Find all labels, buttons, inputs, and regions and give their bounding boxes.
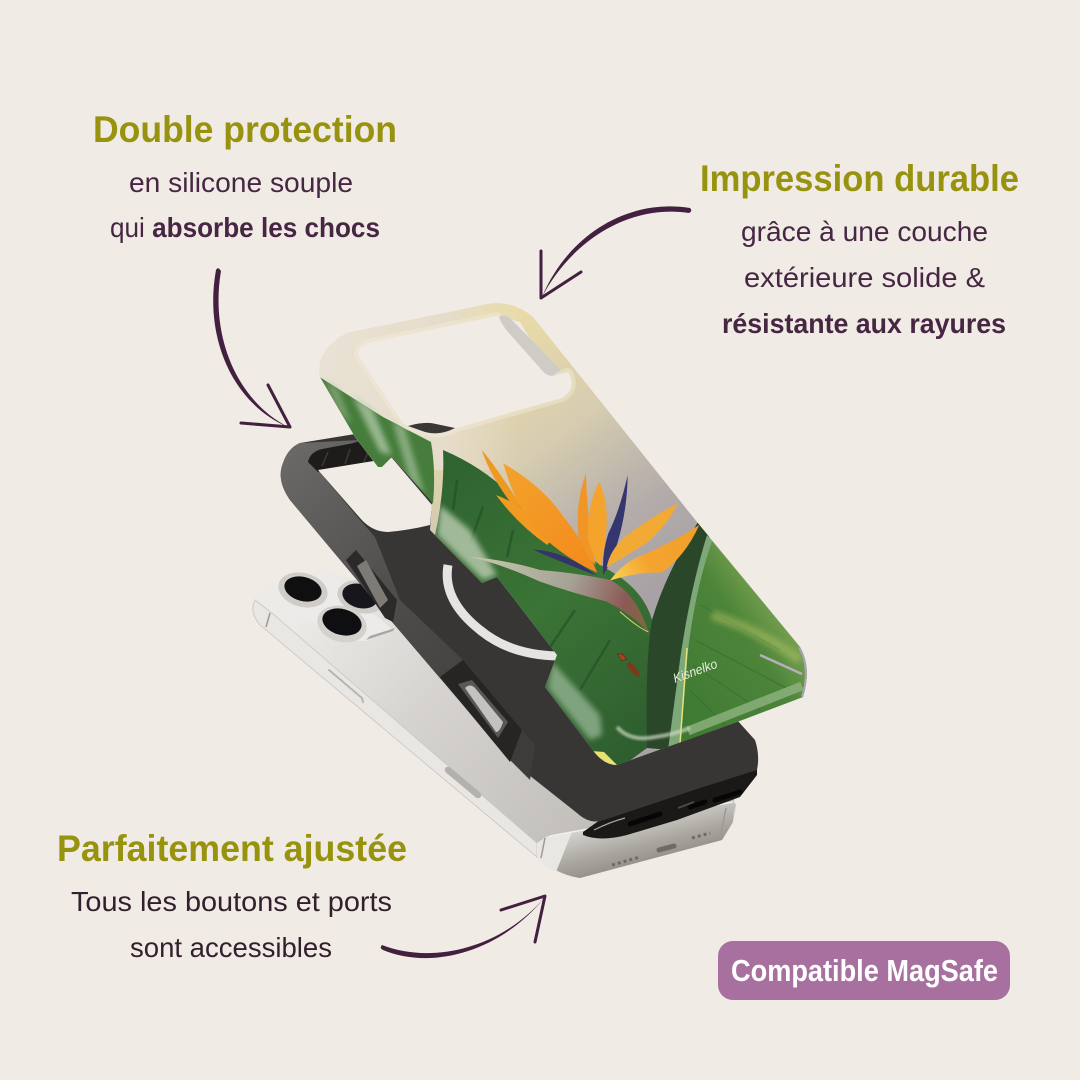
camera opening rim [358, 316, 572, 433]
text: sont accessibles: sont accessibles [130, 932, 332, 963]
badge: compatible magsafe: Compatible MagSafe [731, 953, 998, 988]
phone illustration [251, 290, 812, 878]
arrow: parfaitement ajustée to phone [381, 896, 545, 958]
heading: double protection: Double protection [93, 109, 397, 150]
button opening top [346, 550, 397, 622]
text: tous les boutons et ports: Tous les boutons et ports [71, 886, 392, 917]
text: résistante aux rayures: résistante aux rayures [722, 308, 1006, 339]
right leaf [678, 541, 812, 748]
inner grey wall [499, 316, 561, 376]
case lip [583, 750, 757, 838]
black case seen through opening [408, 423, 455, 433]
side edge [253, 600, 537, 857]
flower sheath [468, 557, 649, 633]
text: en silicone souple: en silicone souple [129, 167, 353, 198]
magsafe ring [447, 565, 558, 656]
blue petals [533, 475, 628, 576]
text: qui absorbe les chocs: qui absorbe les chocs [110, 212, 380, 243]
side buttons [329, 670, 363, 702]
text: extérieure solide: extérieure solide & [744, 262, 985, 293]
text block: double protection [93, 109, 397, 243]
leaf midrib [668, 535, 712, 750]
white phone [251, 567, 740, 878]
arrow: impression durable to case [541, 206, 691, 298]
ant [617, 654, 640, 677]
right petals [607, 503, 699, 581]
black inner case [281, 422, 758, 838]
arrow: double protection to phone [213, 268, 290, 427]
bird of paradise flower [468, 450, 699, 677]
text block: impression durable [700, 158, 1019, 339]
case body [281, 422, 758, 821]
main leaf [435, 450, 652, 770]
orange petals [482, 450, 607, 573]
outer case with printed design [315, 290, 812, 770]
text block: parfaitement ajustée [57, 828, 407, 963]
camera plateau [272, 570, 393, 641]
gloss highlight [617, 686, 802, 738]
bottom ports [630, 792, 740, 824]
leaf top left [318, 376, 434, 504]
camera cut-out [318, 458, 432, 532]
dark leaf band [647, 522, 709, 750]
button opening bottom [440, 660, 522, 762]
camera lenses [274, 567, 388, 648]
camera opening [358, 316, 572, 433]
heading: impression durable: Impression durable [700, 158, 1019, 199]
top ribbed strip [308, 441, 385, 472]
text: grâce à une couche: grâce à une couche [741, 216, 988, 247]
case left rim [281, 440, 535, 780]
badge: compatible magsafe [718, 941, 1010, 1000]
signature: Kisnelko [671, 656, 719, 686]
bottom port [612, 833, 710, 865]
heading: parfaitement ajustée: Parfaitement ajustée [57, 828, 407, 869]
